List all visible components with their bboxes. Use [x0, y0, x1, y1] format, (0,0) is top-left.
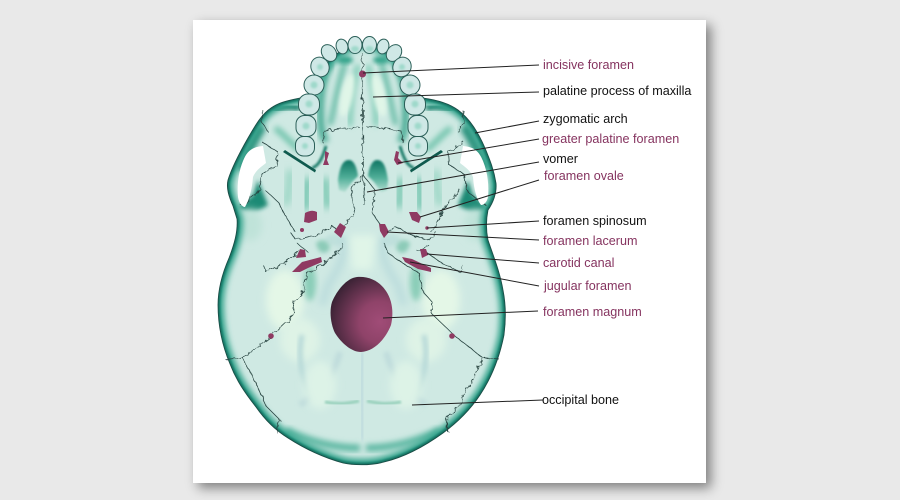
label: occipital bone: occipital bone — [542, 393, 619, 407]
label: palatine process of maxilla: palatine process of maxilla — [543, 84, 691, 98]
label: zygomatic arch: zygomatic arch — [543, 112, 628, 126]
label: foramen lacerum: foramen lacerum — [543, 234, 638, 248]
teeth — [296, 36, 428, 156]
magenta foramina — [268, 70, 455, 339]
leader lines — [363, 65, 543, 405]
label: carotid canal: carotid canal — [543, 256, 614, 270]
label: foramen spinosum: foramen spinosum — [543, 214, 647, 228]
label: jugular foramen: jugular foramen — [543, 279, 632, 293]
label: foramen magnum: foramen magnum — [543, 305, 642, 319]
label: foramen ovale: foramen ovale — [544, 169, 624, 183]
sutures — [226, 53, 500, 433]
foramen magnum — [331, 277, 392, 352]
label: greater palatine foramen: greater palatine foramen — [542, 132, 679, 146]
panel: white card — [193, 20, 706, 483]
skull base — [218, 42, 505, 465]
central ridges — [362, 352, 363, 440]
label: incisive foramen: incisive foramen — [543, 58, 634, 72]
tooth highlights — [302, 46, 422, 149]
label: vomer: vomer — [543, 152, 578, 166]
zygomatic openings — [238, 146, 488, 207]
skull diagram with labels — [218, 36, 692, 466]
